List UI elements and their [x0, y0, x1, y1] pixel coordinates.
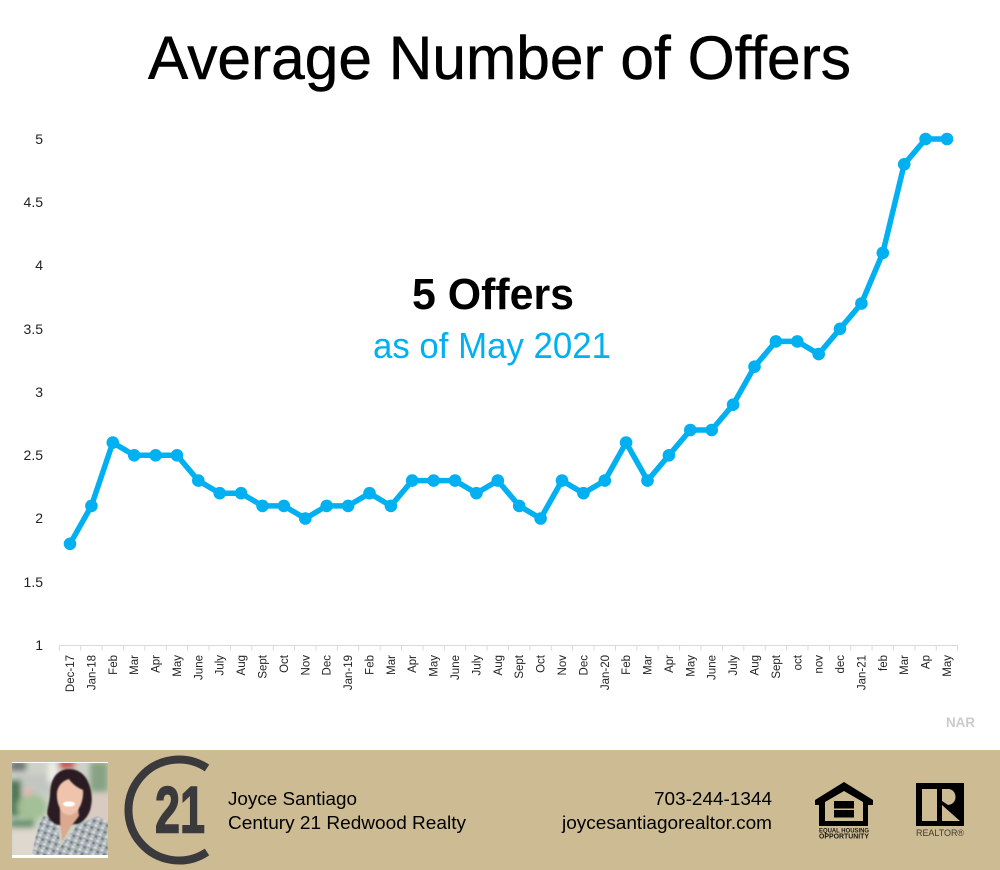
x axis month labels: Jan-19 — [343, 655, 355, 690]
x axis month labels: Nov — [300, 655, 312, 675]
x axis month labels: June — [193, 655, 205, 680]
x axis month labels: Aug — [493, 655, 505, 675]
x axis month labels: Dec — [578, 655, 590, 675]
x axis month labels: Aug — [750, 655, 762, 675]
x axis month labels: feb — [878, 655, 890, 671]
x axis month labels: Sept — [771, 654, 783, 679]
contact phone and website — [561, 789, 772, 833]
x axis month labels: Aug — [236, 655, 248, 675]
x axis month labels: Feb — [108, 655, 120, 675]
agent name and brokerage: Joyce Santiago — [228, 789, 357, 809]
neck and face — [60, 808, 79, 842]
x axis month labels: Jan-18 — [86, 655, 98, 690]
hair — [47, 769, 92, 825]
x axis month labels: Mar — [129, 655, 141, 675]
y axis labels: 5 — [35, 131, 43, 147]
Century 21 logo — [128, 760, 207, 860]
agent name and brokerage: Century 21 Redwood Realty — [228, 813, 466, 833]
contact phone and website: 703-244-1344 — [654, 789, 772, 809]
y axis labels: 4.5 — [24, 194, 43, 210]
x axis month labels: Oct — [536, 654, 548, 673]
x axis month labels: May — [942, 655, 954, 677]
x axis month labels: Apr — [407, 655, 419, 673]
x axis month labels: dec — [835, 655, 847, 674]
x axis month labels: Jan-20 — [600, 655, 612, 690]
icon: equal housing opportunity: EQUAL HOUSING — [819, 828, 869, 834]
title: Average Number of Offers — [148, 24, 851, 92]
x axis month labels: June — [450, 655, 462, 680]
y axis labels: 1.5 — [24, 574, 43, 590]
x axis month labels: nov — [814, 655, 826, 674]
x axis month labels: Dec-17 — [65, 655, 77, 692]
x axis month labels: Sept — [514, 654, 526, 679]
y axis labels: 3.5 — [24, 321, 43, 337]
y axis labels — [24, 131, 43, 653]
x axis month labels: Feb — [621, 655, 633, 675]
Century 21 logo: 21 — [155, 772, 205, 846]
footer band — [0, 750, 1000, 870]
source label: NAR — [946, 714, 975, 730]
x axis month labels: May — [429, 655, 441, 677]
x axis month labels: Nov — [557, 655, 569, 675]
x axis month labels: July — [215, 655, 227, 675]
y axis labels: 4 — [35, 257, 43, 273]
x axis month labels: Apr — [664, 655, 676, 673]
icon: equal housing opportunity — [815, 782, 873, 840]
x axis month labels: May — [685, 655, 697, 677]
line chart: average number of offers — [64, 133, 953, 550]
x axis month labels: Dec — [322, 655, 334, 675]
x axis month labels — [65, 654, 954, 692]
x axis month labels: Apr — [151, 655, 163, 673]
x axis month labels: July — [728, 655, 740, 675]
callout: 5 offers as of May 2021: as of May 2021 — [373, 325, 611, 366]
shirt — [32, 816, 108, 856]
y axis labels: 1 — [35, 637, 43, 653]
x axis month labels: Mar — [386, 655, 398, 675]
x axis month labels: Jan-21 — [856, 655, 868, 690]
x axis month labels: Ap — [921, 655, 933, 669]
icon: realtor — [916, 783, 964, 839]
y axis labels: 2.5 — [24, 447, 43, 463]
x axis month labels: July — [471, 655, 483, 675]
y axis labels: 2 — [35, 510, 43, 526]
agent photo — [10, 761, 110, 858]
contact phone and website: joycesantiagorealtor.com — [561, 813, 772, 833]
x axis month labels: Mar — [642, 655, 654, 675]
x axis month labels: Oct — [279, 654, 291, 673]
x axis month labels: May — [172, 655, 184, 677]
callout: 5 offers as of May 2021: 5 Offers — [412, 270, 574, 319]
x axis month labels: Feb — [364, 655, 376, 675]
y axis labels: 3 — [35, 384, 43, 400]
x axis month labels: Sept — [258, 654, 270, 679]
icon: equal housing opportunity: OPPORTUNITY — [819, 834, 869, 840]
callout: 5 offers as of May 2021 — [373, 270, 611, 366]
x axis month labels: Mar — [899, 655, 911, 675]
icon: realtor: REALTOR® — [916, 828, 964, 839]
x axis line and ticks — [59, 646, 959, 648]
agent name and brokerage — [228, 789, 466, 833]
x axis month labels: oct — [792, 654, 804, 670]
x axis month labels: June — [707, 655, 719, 680]
